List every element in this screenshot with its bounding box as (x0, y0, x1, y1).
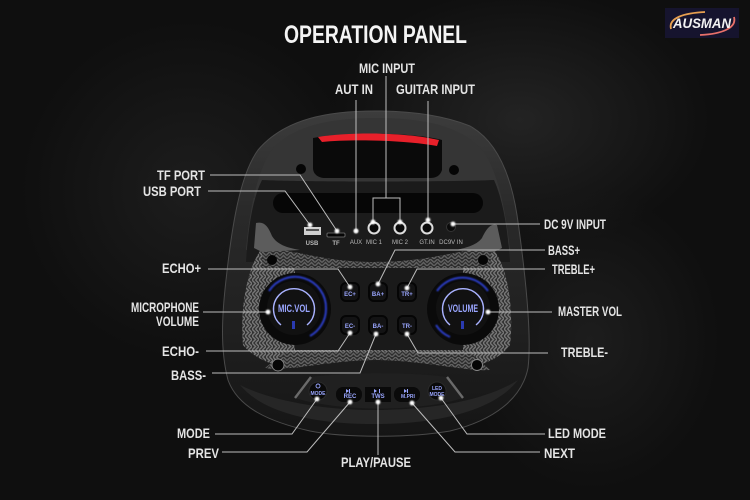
carbon band top and bottom (262, 248, 492, 370)
label: treble-: TREBLE- (561, 344, 608, 360)
label: prev: PREV (188, 445, 220, 461)
tf port (327, 233, 345, 247)
label: echo+: ECHO+ (162, 260, 201, 276)
control buttons: TR- (402, 324, 412, 330)
label: mode: MODE (177, 425, 210, 441)
mic 1 jack: MIC 1 (366, 240, 383, 246)
red light bar (318, 134, 439, 146)
upper face (246, 180, 510, 262)
carbon panel sides (242, 248, 511, 368)
label: master vol: MASTER VOL (558, 303, 622, 319)
control buttons (341, 283, 416, 334)
callout dots (266, 218, 490, 405)
tf port: TF (332, 241, 340, 247)
bottom control strip: REC (344, 394, 357, 400)
handle rim (246, 118, 510, 250)
knob: volume: VOLUME (448, 303, 478, 315)
label: microphone volume: VOLUME (156, 313, 199, 329)
bottom control strip: TWS (371, 394, 385, 400)
knob: volume (427, 273, 499, 345)
control buttons: TR+ (401, 292, 413, 298)
lower base band (240, 380, 518, 424)
bottom control strip: MODE (430, 392, 445, 398)
label: bass-: BASS- (171, 367, 206, 383)
outer shell (222, 111, 529, 436)
dc jack: DC9V IN (439, 240, 463, 246)
central dark panel (295, 268, 463, 350)
label: treble+: TREBLE+ (552, 261, 595, 277)
label: led mode: LED MODE (548, 425, 606, 441)
knob: mic vol: MIC.VOL (278, 303, 310, 315)
guitar jack: GT.IN (419, 240, 435, 246)
label: tf port: TF PORT (157, 167, 205, 183)
label: echo-: ECHO- (162, 343, 199, 359)
dc jack (439, 222, 463, 246)
panel side wings (254, 223, 502, 252)
callout lines (203, 76, 552, 455)
control buttons: EC- (345, 324, 355, 330)
logo: AUSMAN (665, 8, 739, 38)
bottom control strip: LED (432, 386, 442, 392)
label: microphone volume: MICROPHONE (131, 299, 199, 315)
title: OPERATION PANEL (284, 21, 467, 49)
knob: mic vol (259, 273, 331, 345)
control buttons: BA+ (372, 292, 385, 298)
label: aut in: AUT IN (335, 81, 373, 97)
label: play/pause: PLAY/PAUSE (341, 454, 411, 470)
usb port: USB (306, 241, 319, 247)
label: microphone volume (131, 299, 199, 329)
aux jack (350, 228, 362, 246)
label: guitar input: GUITAR INPUT (396, 81, 475, 97)
bottom control strip (295, 373, 463, 408)
speaker body (222, 111, 529, 436)
logo: AUSMAN: AUSMAN (672, 16, 731, 31)
panel screws (267, 255, 488, 371)
label: bass+: BASS+ (548, 242, 580, 258)
label: next: NEXT (544, 445, 575, 461)
handle recess (313, 134, 442, 178)
bottom control strip: M.PRI (401, 394, 416, 400)
mic 2 jack: MIC 2 (392, 240, 409, 246)
label: usb port: USB PORT (143, 183, 201, 199)
usb port (304, 227, 321, 247)
long slot (273, 193, 483, 213)
aux jack: AUX (350, 240, 362, 246)
label: dc 9v input: DC 9V INPUT (544, 216, 606, 232)
label: mic input: MIC INPUT (359, 60, 415, 76)
mic 2 jack (392, 222, 409, 246)
mic 1 jack (366, 222, 383, 246)
control buttons: EC+ (344, 292, 356, 298)
screw holes top (296, 164, 459, 175)
control buttons: BA- (373, 324, 383, 330)
guitar jack (419, 222, 435, 246)
bottom control strip: MODE (310, 391, 326, 397)
